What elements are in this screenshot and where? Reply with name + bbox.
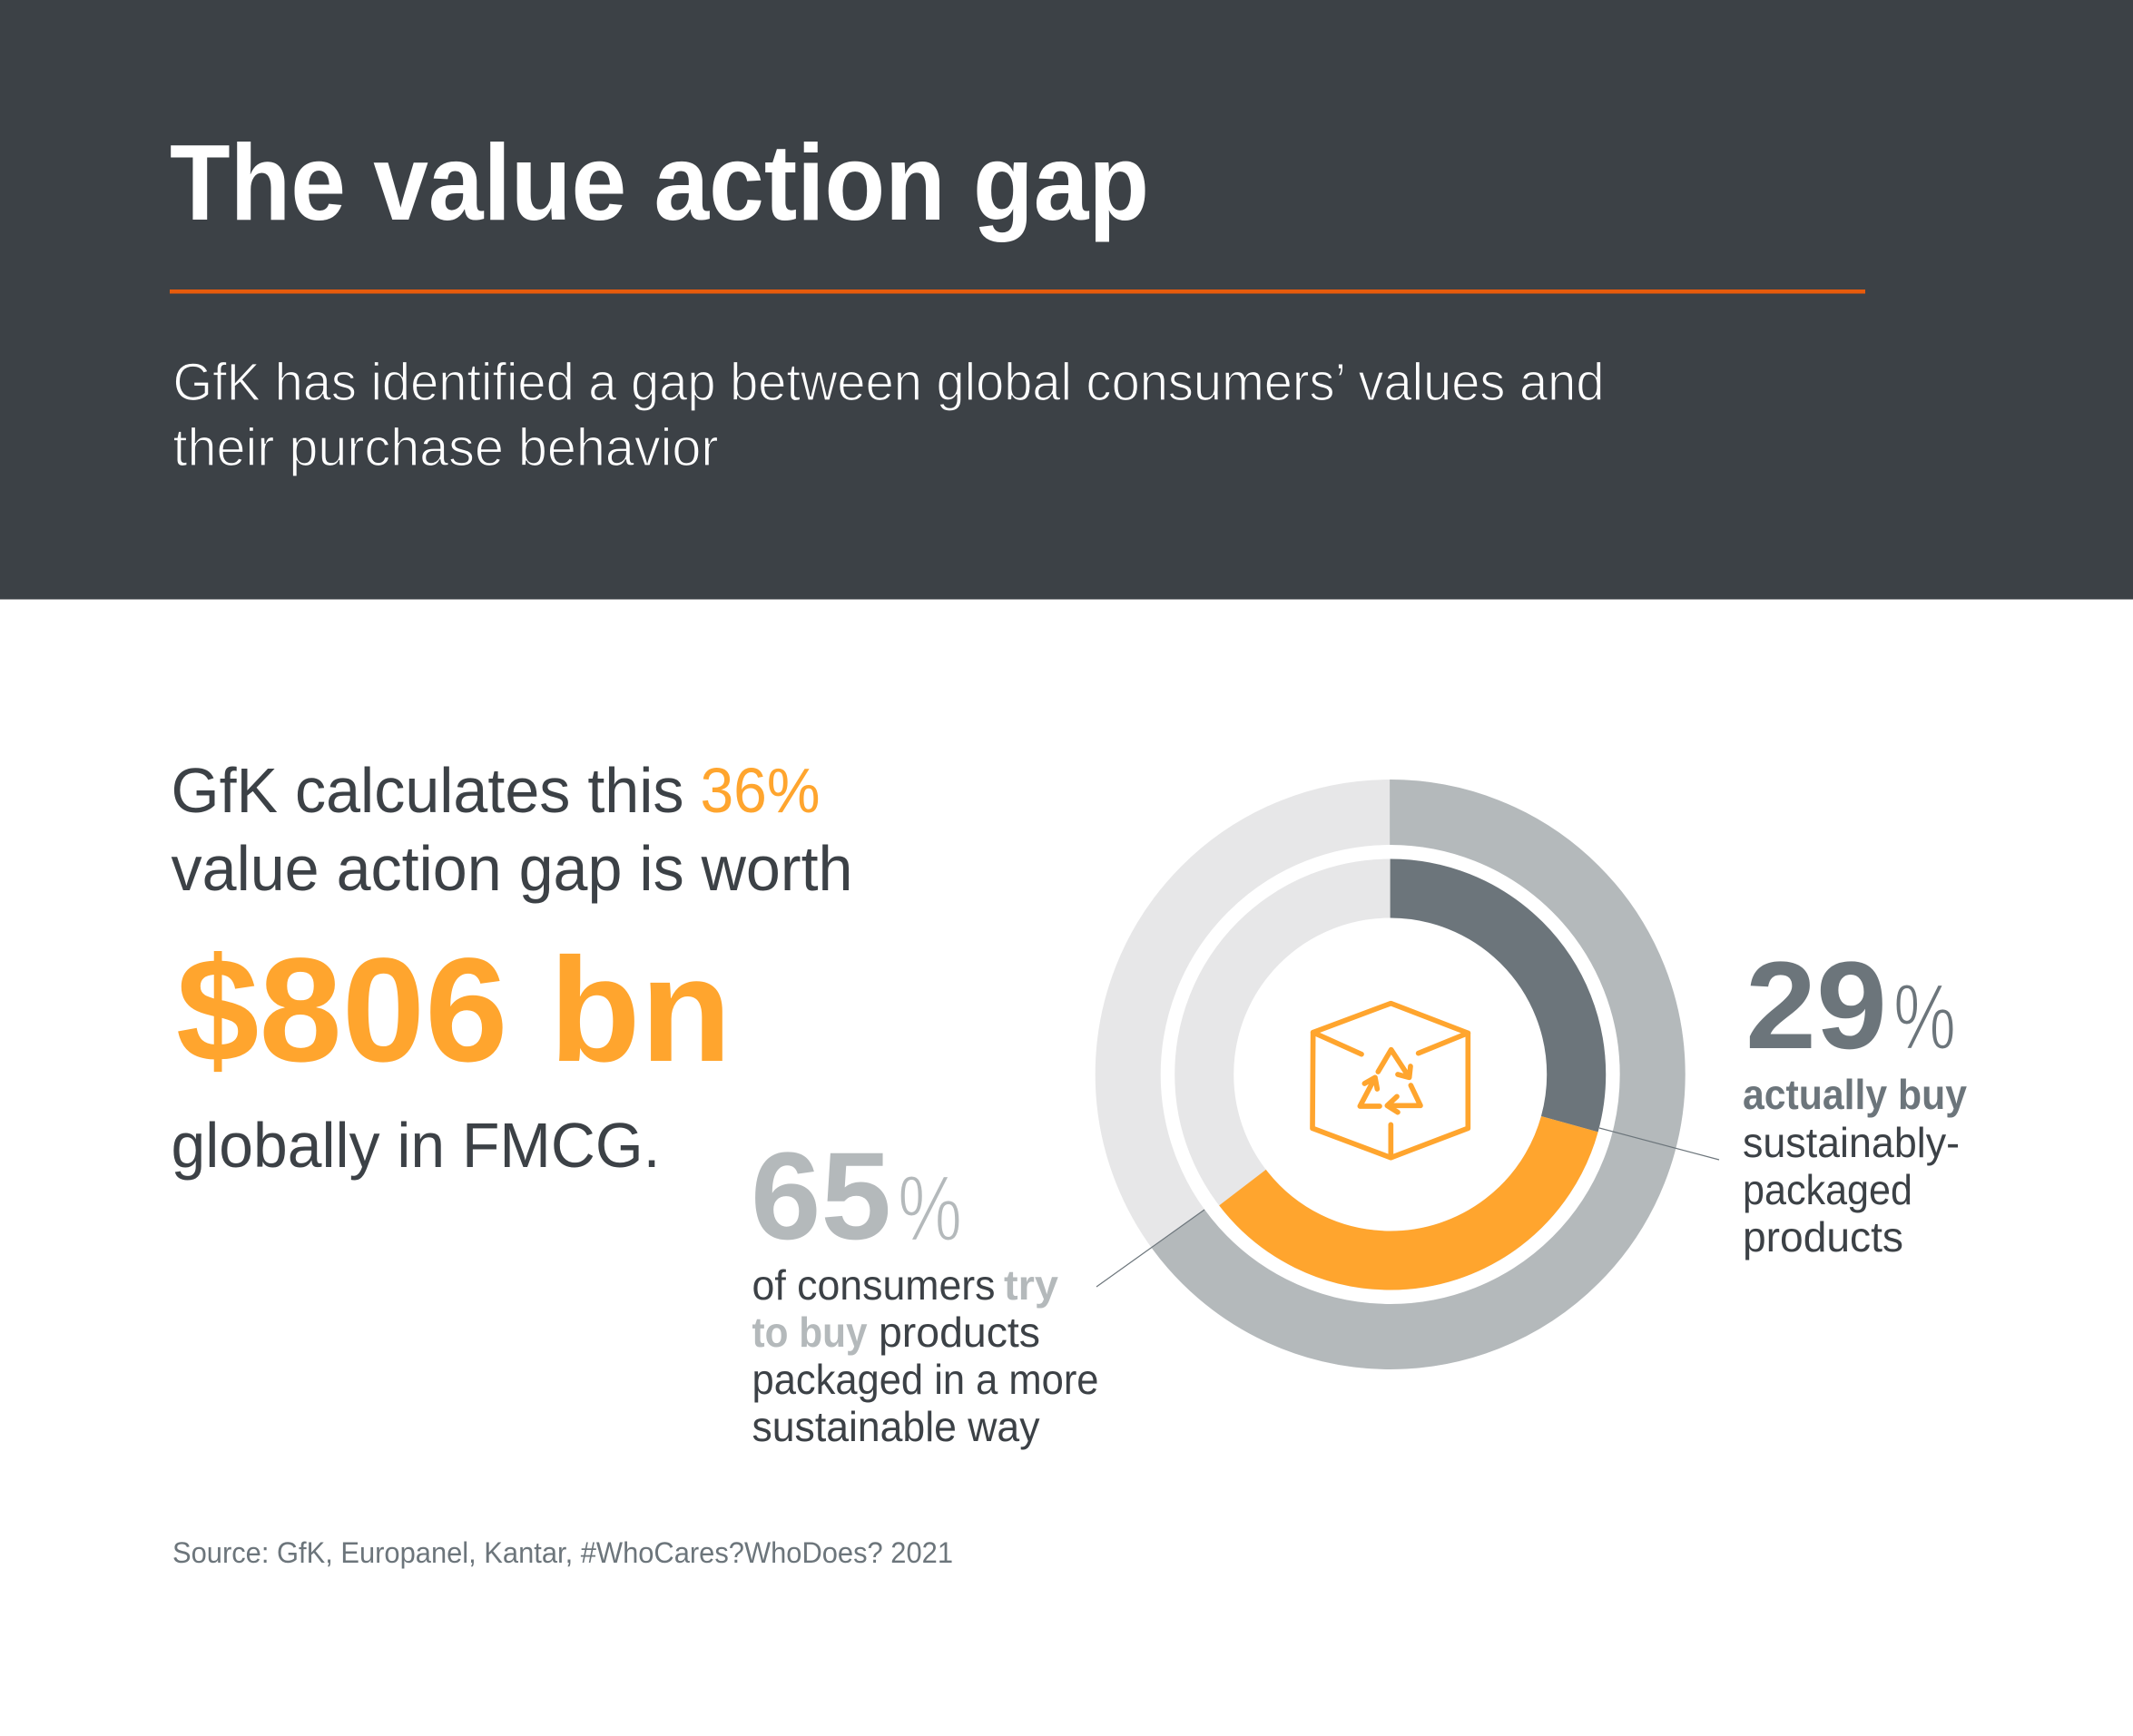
- gap statement: [171, 755, 853, 904]
- inner ring: 29% actually buy, 36% gap: [1204, 888, 1577, 1260]
- stat: 29%: [1745, 937, 1956, 1075]
- stat description: 65%: packaged in a more: [752, 1356, 1098, 1403]
- stat: 29%: 29: [1745, 937, 1887, 1075]
- stat description: 65%: products: [879, 1309, 1040, 1356]
- donut chart: [1128, 812, 1653, 1337]
- leader line: 29%: [1599, 1128, 1719, 1160]
- stat description: 65%: of consumers: [752, 1261, 995, 1309]
- subtitle: [172, 353, 1605, 477]
- stat description: 65%: to buy: [752, 1309, 868, 1356]
- stat description: 65%: try: [1004, 1261, 1058, 1309]
- header panel: [0, 0, 2133, 599]
- stat: 29%: %: [1893, 965, 1956, 1069]
- stat description: 29%: [1743, 1071, 1967, 1260]
- stat description: 29%: products: [1743, 1213, 1903, 1260]
- subtitle: their purchase behavior: [172, 418, 719, 477]
- gap statement: 36%: [701, 755, 821, 826]
- title: The value action gap: [170, 123, 1149, 243]
- stat description: 65%: sustainable way: [752, 1403, 1040, 1450]
- big number: $806 bn: $806 bn: [176, 927, 732, 1093]
- stat: 65%: [751, 1127, 962, 1266]
- globally in FMCG: globally in FMCG.: [171, 1110, 661, 1181]
- stat: 65%: 65: [751, 1127, 891, 1266]
- gap statement: value action gap is worth: [171, 833, 853, 904]
- icon: recycling box: [1312, 1004, 1468, 1158]
- stat description: 29%: actually buy: [1743, 1071, 1967, 1118]
- outer ring: 65% try to buy: [1128, 812, 1653, 1337]
- gap statement: GfK calculates this: [171, 755, 684, 826]
- stat description: 65%: [752, 1261, 1098, 1450]
- stat: 65%: %: [898, 1156, 962, 1260]
- subtitle: GfK has identified a gap between global consumers’ values and: [172, 353, 1605, 412]
- stat description: 29%: sustainably-: [1743, 1119, 1960, 1166]
- stat description: 29%: packaged: [1743, 1166, 1912, 1213]
- source: Source: GfK, Europanel, Kantar, #WhoCares?WhoDoes? 2021: [172, 1536, 953, 1569]
- leader line: 65%: [1096, 1210, 1204, 1287]
